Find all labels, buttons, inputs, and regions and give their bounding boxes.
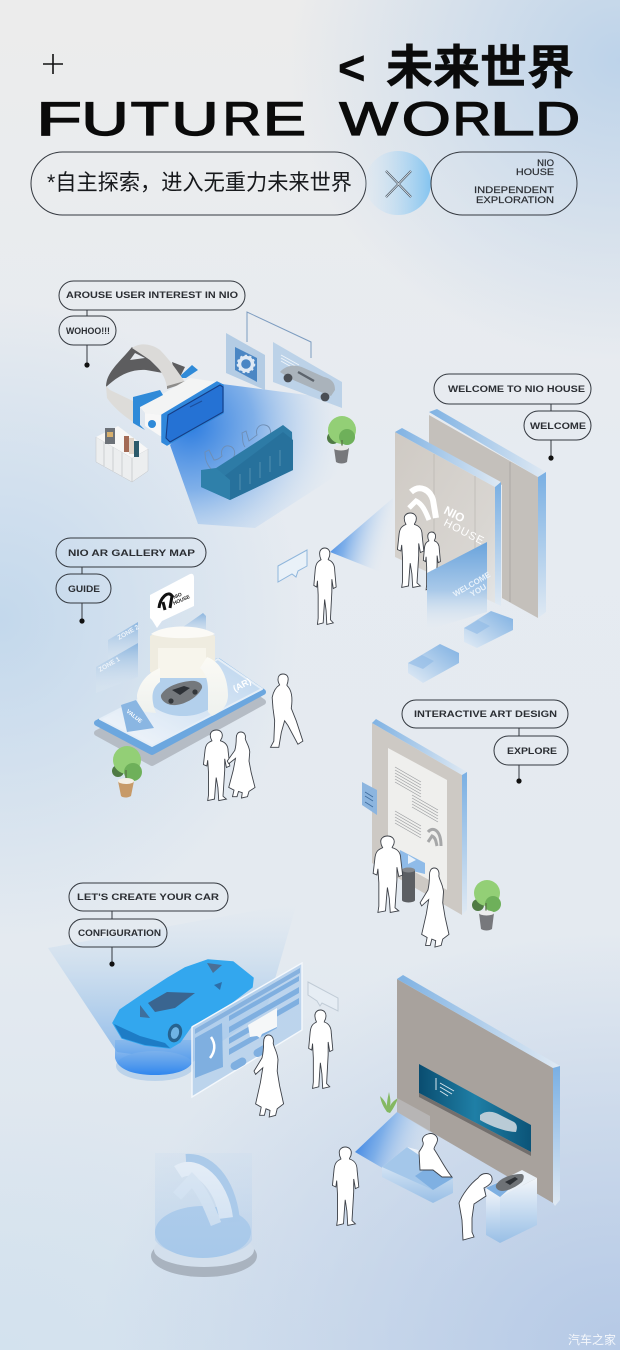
right panel [183,613,206,640]
sitting person [419,1134,452,1177]
front wall [395,428,501,606]
VR strap: dark right piece [172,362,185,378]
VR body [133,378,217,436]
config screen [192,963,302,1097]
NIO House pill: INDEPENDENT [474,185,554,196]
plus mark [43,54,63,74]
label: configuration [69,911,167,967]
scene: NIO logo glass dome [151,1153,257,1277]
small sign [121,700,154,732]
label: guide [56,567,111,624]
logo bubble: NIO [172,592,183,601]
wall face [372,723,462,915]
label: guide: GUIDE [68,584,100,594]
right chat bubble [308,982,338,1011]
title: FUTURE WORLD [36,93,580,146]
zone 2 panel [108,622,141,665]
VR strap: dark back [106,347,163,387]
scene: screen wall and visitors [332,975,560,1243]
title: FUTURE WORLD: U [81,93,129,146]
walking person [271,674,303,747]
wall text HOUSE: HOUSE [442,517,486,548]
logo bubble [150,574,194,628]
logo chevron [177,1180,216,1224]
label: welcome [524,404,591,461]
poster [388,748,447,890]
label: interactive art design [402,700,568,728]
label: explore: EXPLORE [507,746,557,756]
car turntable [115,1040,194,1081]
pedestal car [496,1174,524,1191]
zone 1 panel [96,643,138,693]
speech bubble [278,550,307,582]
NIO logo on wall [409,488,436,520]
label: interactive art design: INTERACTIVE ART DESIGN [414,709,557,719]
wall side [462,772,467,915]
VR strap: hole in dark band [130,353,145,360]
label: arouse: AROUSE USER INTEREST IN NIO [66,290,238,300]
label: arouse [59,281,245,310]
VR strap: band buckle [167,381,185,389]
side panel [362,782,377,815]
title: FUTURE WORLD: W [339,93,398,146]
title: FUTURE WORLD: E [263,93,306,146]
label: gallery map [56,538,206,567]
title: FUTURE WORLD: R [453,93,491,146]
title: Chinese heading: 未来世界 [386,41,574,94]
left arc wall [137,668,160,713]
sofa [201,425,293,500]
label: welcome: WELCOME [530,421,586,431]
VR strap: blue tip [178,365,198,378]
label: let's create: LET'S CREATE YOUR CAR [77,892,220,902]
wall top [397,975,560,1068]
wall text NIO: NIO [442,503,467,525]
small sign: VALUE [125,709,143,725]
subtitle pill [31,152,366,215]
base top [154,1233,254,1267]
title: FUTURE WORLD: T [131,93,169,146]
photographer cone [330,498,393,577]
zone 1 panel: ZONE 1 [98,656,122,674]
title: FUTURE WORLD: L [489,93,535,146]
car on turntable [161,681,202,705]
AR mark: (AR) [231,676,253,694]
welcome text: WELCOME [452,570,493,599]
label: gallery map: NIO AR GALLERY MAP [68,548,195,558]
bending person [459,1174,492,1240]
poster logo [428,829,441,846]
scene: car configuration [48,903,338,1117]
scene: VR headset [96,312,345,528]
man [397,513,424,587]
NIO House pill [431,152,577,215]
label: configuration: CONFIGURATION [78,928,161,938]
floor circle [147,672,219,716]
label: explore [494,728,568,784]
scene: AR gallery map [96,574,303,801]
central backdrop [150,626,215,678]
panel frame line [247,312,311,358]
photographer [332,1147,359,1225]
blue circle with X [365,151,431,215]
reception desk [382,1147,453,1203]
VR strap: top band [132,344,185,388]
sofa audience outlines [205,425,277,470]
dome base [151,1235,257,1277]
welcome board [427,542,487,630]
step block B [408,644,459,683]
cylinder kiosk [402,868,415,902]
wall side [553,1066,560,1206]
cabinet [96,426,148,482]
step block A [464,611,513,648]
video panel [400,850,425,874]
phone woman [309,1010,333,1088]
title: FUTURE WORLD: D [535,93,580,146]
wall top [372,719,467,775]
logo arc [178,1169,226,1218]
title: FUTURE WORLD: R [223,93,261,146]
you text: YOU [468,582,488,599]
logo bubble: HOUSE [172,594,192,607]
label: welcome to nio house [434,374,591,404]
NIO House pill: EXPLORATION [476,195,554,206]
title: Chinese heading: < [338,41,365,94]
photographer [314,548,336,624]
car panel [273,342,342,408]
plant 3 [472,880,501,930]
pedestal [486,1170,537,1243]
NIO House pill: HOUSE [516,167,554,178]
VR front plate [162,382,223,445]
label: welcome to nio house: WELCOME TO NIO HOUSE [448,384,585,394]
plant 1 [327,416,356,464]
gear panel [226,333,265,390]
glass cylinder [155,1153,252,1256]
label: wohoo [59,310,116,368]
platform shadow [97,671,263,763]
inner disc [155,1206,251,1258]
title: FUTURE WORLD: O [402,93,451,146]
sports car [113,960,253,1048]
touching woman [254,1035,284,1117]
visitor left [373,836,403,912]
spotlight cone [48,903,297,1062]
label: let's create [69,883,228,911]
scene: NIO House entrance [278,409,546,683]
logo shadow arc [186,1160,234,1222]
display screen [419,1064,531,1156]
title: FUTURE WORLD: U [171,93,219,146]
child [423,532,440,590]
VR strap: lower band [106,386,137,422]
platform rim [97,661,263,752]
NIO House pill: NIO [537,158,554,169]
person right [227,732,255,798]
VR projection cone [170,384,345,528]
right arc wall [200,657,228,716]
scene: interactive art wall [362,719,467,947]
subtitle pill: *自主探索，进入无重力未来世界 [47,170,352,195]
person left [203,730,230,801]
wall face [397,979,553,1203]
floor sheen [397,1098,430,1132]
visitor right [420,868,449,947]
plant 2 [112,746,142,798]
plant grass [380,1092,398,1113]
photographer cone [355,1112,432,1190]
back wall [429,409,546,618]
label: wohoo: WOHOO!!! [66,326,110,336]
title: FUTURE WORLD: F [36,93,82,146]
watermark: 汽车之家 [568,1332,616,1347]
platform top [100,659,262,746]
poster text lines [395,767,438,838]
zone 2 panel: ZONE 2 [116,624,141,642]
